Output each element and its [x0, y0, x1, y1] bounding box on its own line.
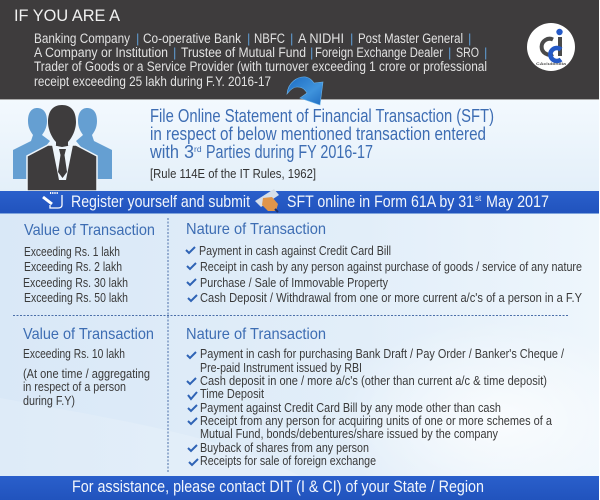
header entity list: |: [350, 31, 353, 46]
main heading: rd: [194, 144, 202, 154]
main heading: in respect of below mentioned transaction entered: [150, 124, 486, 144]
header entity list: |: [136, 31, 139, 46]
main heading: with: [149, 142, 179, 162]
panel: first value column: Exceeding Rs. 30 lakh: [23, 276, 128, 290]
header entity list: |: [310, 45, 313, 60]
main heading: [149, 106, 494, 162]
header entity list: Foreign Exchange Dealer: [315, 45, 443, 60]
panel: second nature column: Mutual Fund, bonds/debentures/share issued by the company: [200, 427, 499, 441]
panel: first value column: Exceeding Rs. 2 lakh: [24, 260, 122, 274]
panel: first nature column: [186, 221, 583, 305]
icon: hand with card: [255, 189, 279, 212]
panel: second nature column: Receipt from any person for acquiring units of one or more schemes of a: [200, 414, 552, 428]
panel: second nature column: Buyback of shares from any person: [200, 441, 369, 455]
center person: [27, 105, 97, 191]
main heading: File Online Statement of Financial Transaction (SFT): [150, 106, 494, 126]
side person right: [76, 108, 112, 179]
main heading: 3: [184, 142, 194, 162]
panel: first value column: Exceeding Rs. 1 lakh: [24, 245, 120, 259]
header entity list: |: [290, 31, 293, 46]
header band: [0, 0, 599, 100]
header entity list: |: [484, 45, 487, 60]
header entity list: Trader of Goods or a Service Provider (with turnover exceeding 1 crore or professional: [34, 59, 487, 74]
icon: business people: [13, 105, 112, 191]
header entity list: A NIDHI: [298, 31, 344, 46]
footer bar: For assistance, please contact DIT (I & CI) of your State / Region: [72, 478, 484, 496]
header entity list: Co-operative Bank: [143, 31, 241, 46]
panel: second value column: in respect of a person: [23, 380, 126, 394]
header entity list: NBFC: [254, 31, 285, 46]
rule reference: [Rule 114E of the IT Rules, 1962]: [150, 167, 316, 181]
panel: second nature column: Receipts for sale of foreign exchange: [200, 454, 376, 468]
deadline bar: Register yourself and submit: [71, 193, 250, 211]
header entity list: SRO: [456, 45, 479, 60]
header entity list: |: [247, 31, 250, 46]
check marks: [187, 352, 198, 465]
panel: second nature column: Time Deposit: [200, 387, 264, 401]
header entity list: Banking Company: [34, 31, 130, 46]
header title: IF YOU ARE A: [14, 7, 120, 25]
panel: first value column: Value of Transaction: [24, 222, 155, 239]
panel: first value column: Exceeding Rs. 50 lakh: [24, 291, 128, 305]
logo: [527, 23, 575, 71]
header entity list: |: [173, 45, 176, 60]
side person left: [13, 108, 50, 179]
panel: second nature column: [186, 326, 564, 468]
header entity list: |: [448, 45, 451, 60]
panel: second value column: Value of Transaction: [23, 326, 154, 343]
dividers: [13, 218, 568, 473]
check marks: [186, 247, 197, 301]
deadline bar: [0, 189, 599, 214]
deadline bar: May 2017: [486, 193, 549, 211]
header entity list: receipt exceeding 25 lakh during F.Y. 2016-17: [34, 74, 271, 89]
panel: second nature column: Nature of Transaction: [186, 326, 326, 343]
header entity list: [34, 31, 487, 89]
panel: second nature column: Pre-paid Instrument issued by RBI: [200, 361, 362, 375]
icon: curved arrow: [287, 77, 323, 105]
deadline bar: SFT online in Form 61A by 31: [287, 193, 474, 211]
panel: second value column: (At one time / aggregating: [23, 367, 150, 381]
panel: first nature column: Nature of Transaction: [186, 221, 326, 238]
logo: CAclubindia: [536, 61, 567, 66]
panel: second value column: during F.Y): [23, 394, 75, 408]
header entity list: Post Master General: [358, 31, 463, 46]
panel: second nature column: Cash deposit in one / more a/c's (other than current a/c & time deposit): [200, 374, 547, 388]
deadline bar: st: [475, 194, 482, 203]
icon: checklist: [43, 193, 62, 208]
header entity list: Trustee of Mutual Fund: [181, 45, 306, 60]
panel: second value column: [23, 326, 154, 408]
panel: first nature column: Purchase / Sale of Immovable Property: [200, 276, 389, 290]
panel: first nature column: Payment in cash against Credit Card Bill: [199, 244, 391, 258]
header entity list: A Company or Institution: [34, 45, 168, 60]
main heading: Parties during FY 2016-17: [206, 142, 373, 162]
panel: first value column: [23, 222, 155, 305]
panel: second value column: Exceeding Rs. 10 lakh: [23, 347, 125, 361]
footer bar: [0, 476, 599, 500]
panel: second nature column: Payment against Credit Card Bill by any mode other than cash: [200, 401, 501, 415]
header entity list: |: [468, 31, 471, 46]
